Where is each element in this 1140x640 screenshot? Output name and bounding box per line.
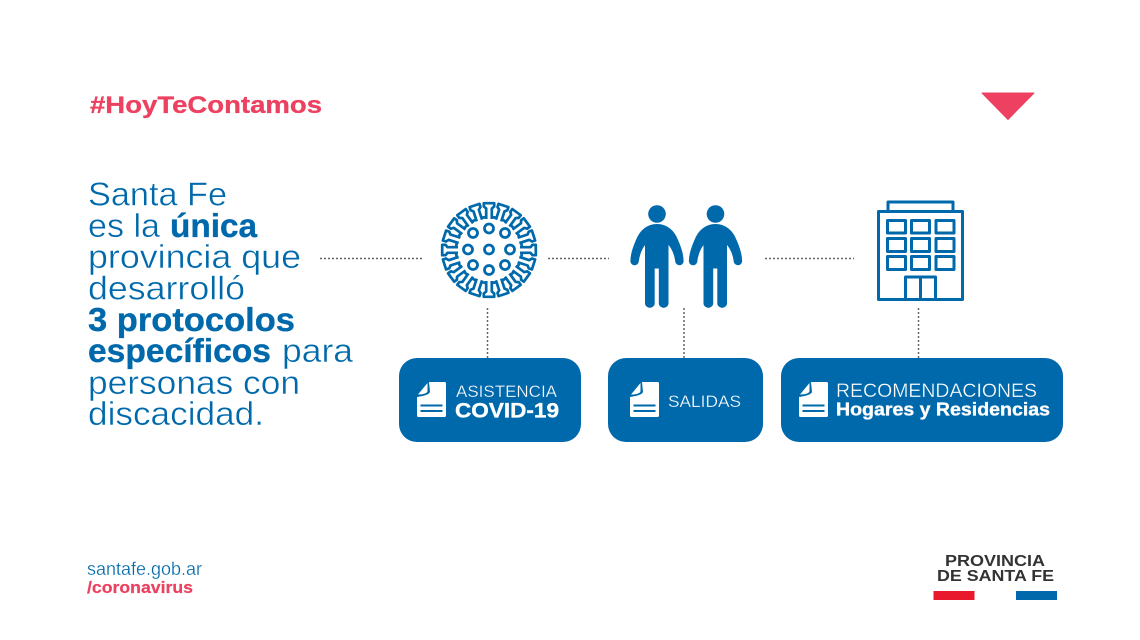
- card: Salidas: SALIDAS: [668, 392, 741, 411]
- main statement text: para: [282, 332, 354, 369]
- card: Asistencia COVID-19: COVID-19: [455, 400, 559, 422]
- card: Recomendaciones Hogares y Residencias: RECOMENDACIONES: [836, 381, 1037, 402]
- card: Salidas: [608, 358, 763, 442]
- main statement text: [88, 176, 354, 432]
- main statement text: 3 protocolos: [88, 301, 295, 338]
- main statement text: es la: [88, 207, 161, 244]
- logo: Provincia de Santa Fe: DE SANTA FE: [937, 568, 1054, 585]
- icon: document: [799, 382, 828, 417]
- icon: virus: [442, 203, 536, 297]
- main statement text: específicos: [88, 332, 271, 369]
- icon: building: [878, 202, 962, 300]
- card: Recomendaciones Hogares y Residencias: Hogares y Residencias: [836, 400, 1050, 420]
- hashtag heading: #HoyTeContamos: [90, 92, 322, 119]
- main statement text: desarrolló: [88, 270, 245, 306]
- main statement text: personas con: [88, 364, 300, 401]
- icon: red triangle marker: [982, 93, 1034, 120]
- main statement text: Santa Fe: [88, 176, 227, 212]
- icon: document: [417, 382, 446, 417]
- main statement text: provincia que: [88, 238, 301, 275]
- logo: Provincia de Santa Fe: PROVINCIA: [945, 553, 1045, 570]
- main statement text: única: [170, 207, 258, 244]
- icon: two people: [631, 205, 742, 307]
- website link: /coronavirus: [87, 579, 193, 597]
- main statement text: discacidad.: [88, 395, 264, 432]
- logo: Provincia de Santa Fe: [934, 553, 1057, 600]
- icon: document: [630, 382, 659, 417]
- card: Recomendaciones Hogares y Residencias: [781, 358, 1063, 442]
- website link: [87, 559, 202, 597]
- card: Asistencia COVID-19: ASISTENCIA: [456, 382, 558, 401]
- website link: santafe.gob.ar: [87, 559, 202, 579]
- card: Asistencia COVID-19: [399, 358, 581, 442]
